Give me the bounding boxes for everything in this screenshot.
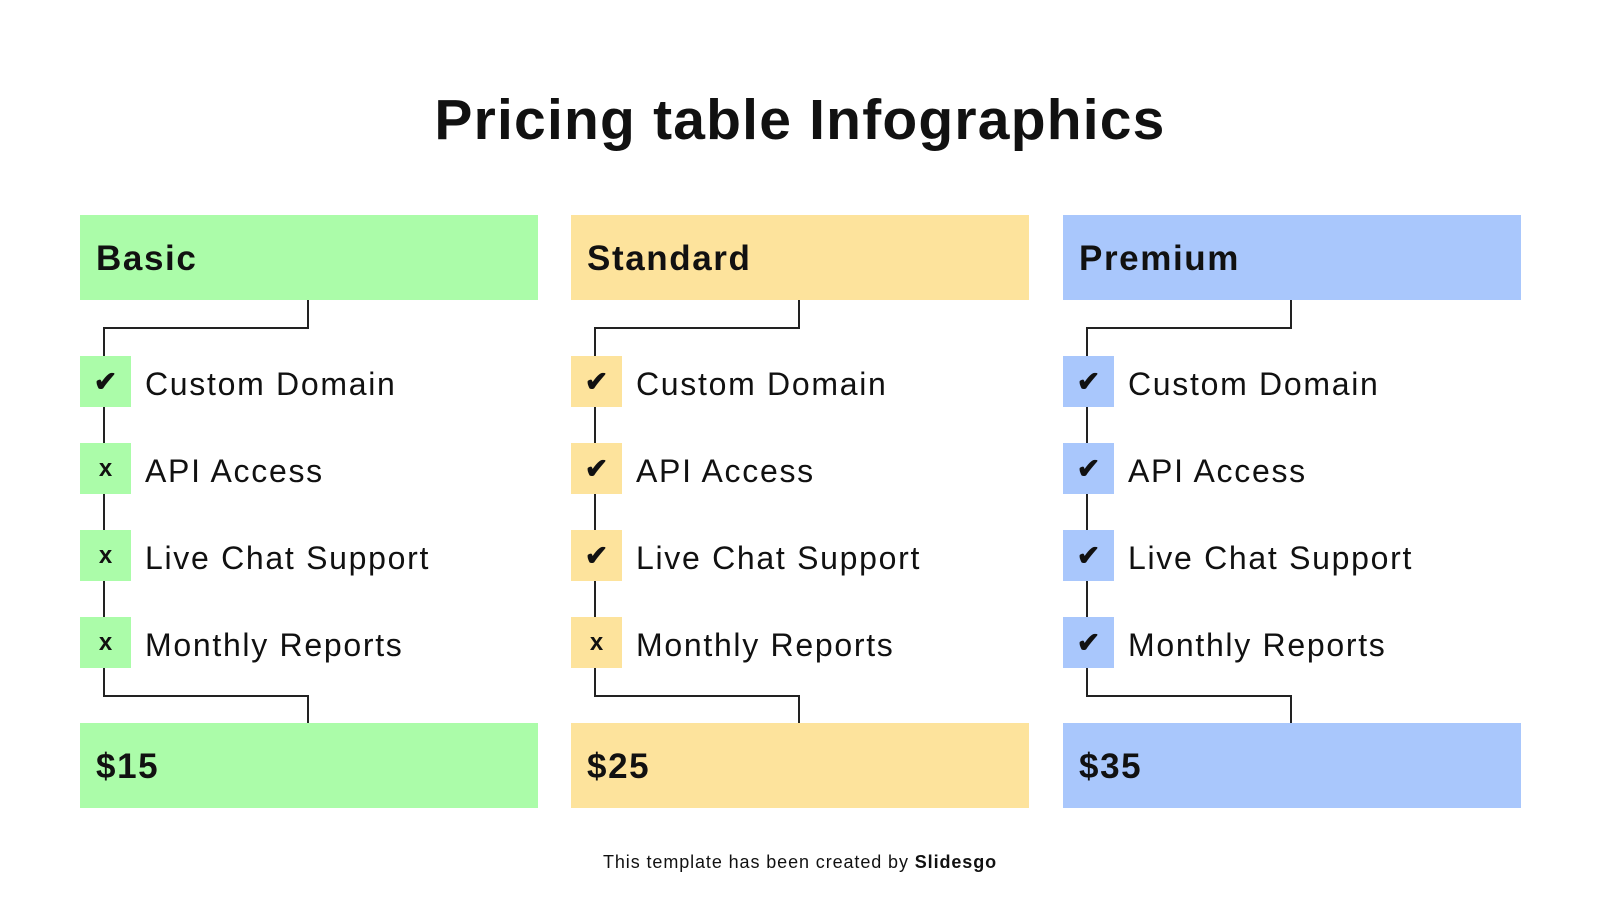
feature: monthly reports <box>80 617 403 668</box>
feature: custom domain: ✔ <box>94 366 117 397</box>
feature: api access <box>1063 443 1307 494</box>
connectors: premium <box>1086 300 1292 723</box>
feature: monthly reports <box>571 617 894 668</box>
feature: custom domain: Custom Domain <box>636 366 888 402</box>
header: standard: Standard <box>587 239 752 278</box>
feature: monthly reports: x <box>590 629 603 656</box>
feature: custom domain <box>571 356 888 407</box>
feature: api access <box>80 443 324 494</box>
feature: custom domain: Custom Domain <box>145 366 397 402</box>
feature: api access: API Access <box>1128 453 1307 489</box>
price: premium: $35 <box>1079 747 1142 786</box>
title: Pricing table Infographics <box>434 88 1166 152</box>
feature: monthly reports: Monthly Reports <box>1128 627 1386 663</box>
panel: premium <box>1063 215 1521 808</box>
panel: standard <box>571 215 1029 808</box>
feature: api access: API Access <box>636 453 815 489</box>
header: standard <box>571 215 1029 300</box>
feature: monthly reports <box>1063 617 1386 668</box>
feature: custom domain <box>80 356 397 407</box>
price: standard <box>571 723 1029 808</box>
feature: api access: ✔ <box>1077 453 1100 484</box>
header: basic <box>80 215 538 300</box>
feature: custom domain: ✔ <box>1077 366 1100 397</box>
feature: live chat: Live Chat Support <box>636 540 921 576</box>
feature: live chat: ✔ <box>585 540 608 571</box>
price: premium <box>1063 723 1521 808</box>
feature: live chat <box>1063 530 1413 581</box>
feature: monthly reports: Monthly Reports <box>145 627 403 663</box>
price: basic: $15 <box>96 747 159 786</box>
feature: live chat: ✔ <box>1077 540 1100 571</box>
price: basic <box>80 723 538 808</box>
header: basic: Basic <box>96 239 197 278</box>
feature: custom domain: Custom Domain <box>1128 366 1380 402</box>
feature: live chat: Live Chat Support <box>145 540 430 576</box>
connectors: basic <box>103 300 309 723</box>
feature: api access: API Access <box>145 453 324 489</box>
feature: live chat: Live Chat Support <box>1128 540 1413 576</box>
feature: live chat <box>571 530 921 581</box>
feature: api access: x <box>99 455 112 482</box>
feature: live chat: x <box>99 542 112 569</box>
feature: custom domain: ✔ <box>585 366 608 397</box>
feature: monthly reports: Monthly Reports <box>636 627 894 663</box>
price: standard: $25 <box>587 747 650 786</box>
connectors: standard <box>594 300 800 723</box>
footer credit: This template has been created by Slidesgo <box>603 852 997 872</box>
feature: monthly reports: ✔ <box>1077 627 1100 658</box>
header: premium <box>1063 215 1521 300</box>
feature: api access <box>571 443 815 494</box>
feature: monthly reports: x <box>99 629 112 656</box>
header: premium: Premium <box>1079 239 1240 278</box>
panel: basic <box>80 215 538 808</box>
feature: live chat <box>80 530 430 581</box>
feature: api access: ✔ <box>585 453 608 484</box>
feature: custom domain <box>1063 356 1380 407</box>
